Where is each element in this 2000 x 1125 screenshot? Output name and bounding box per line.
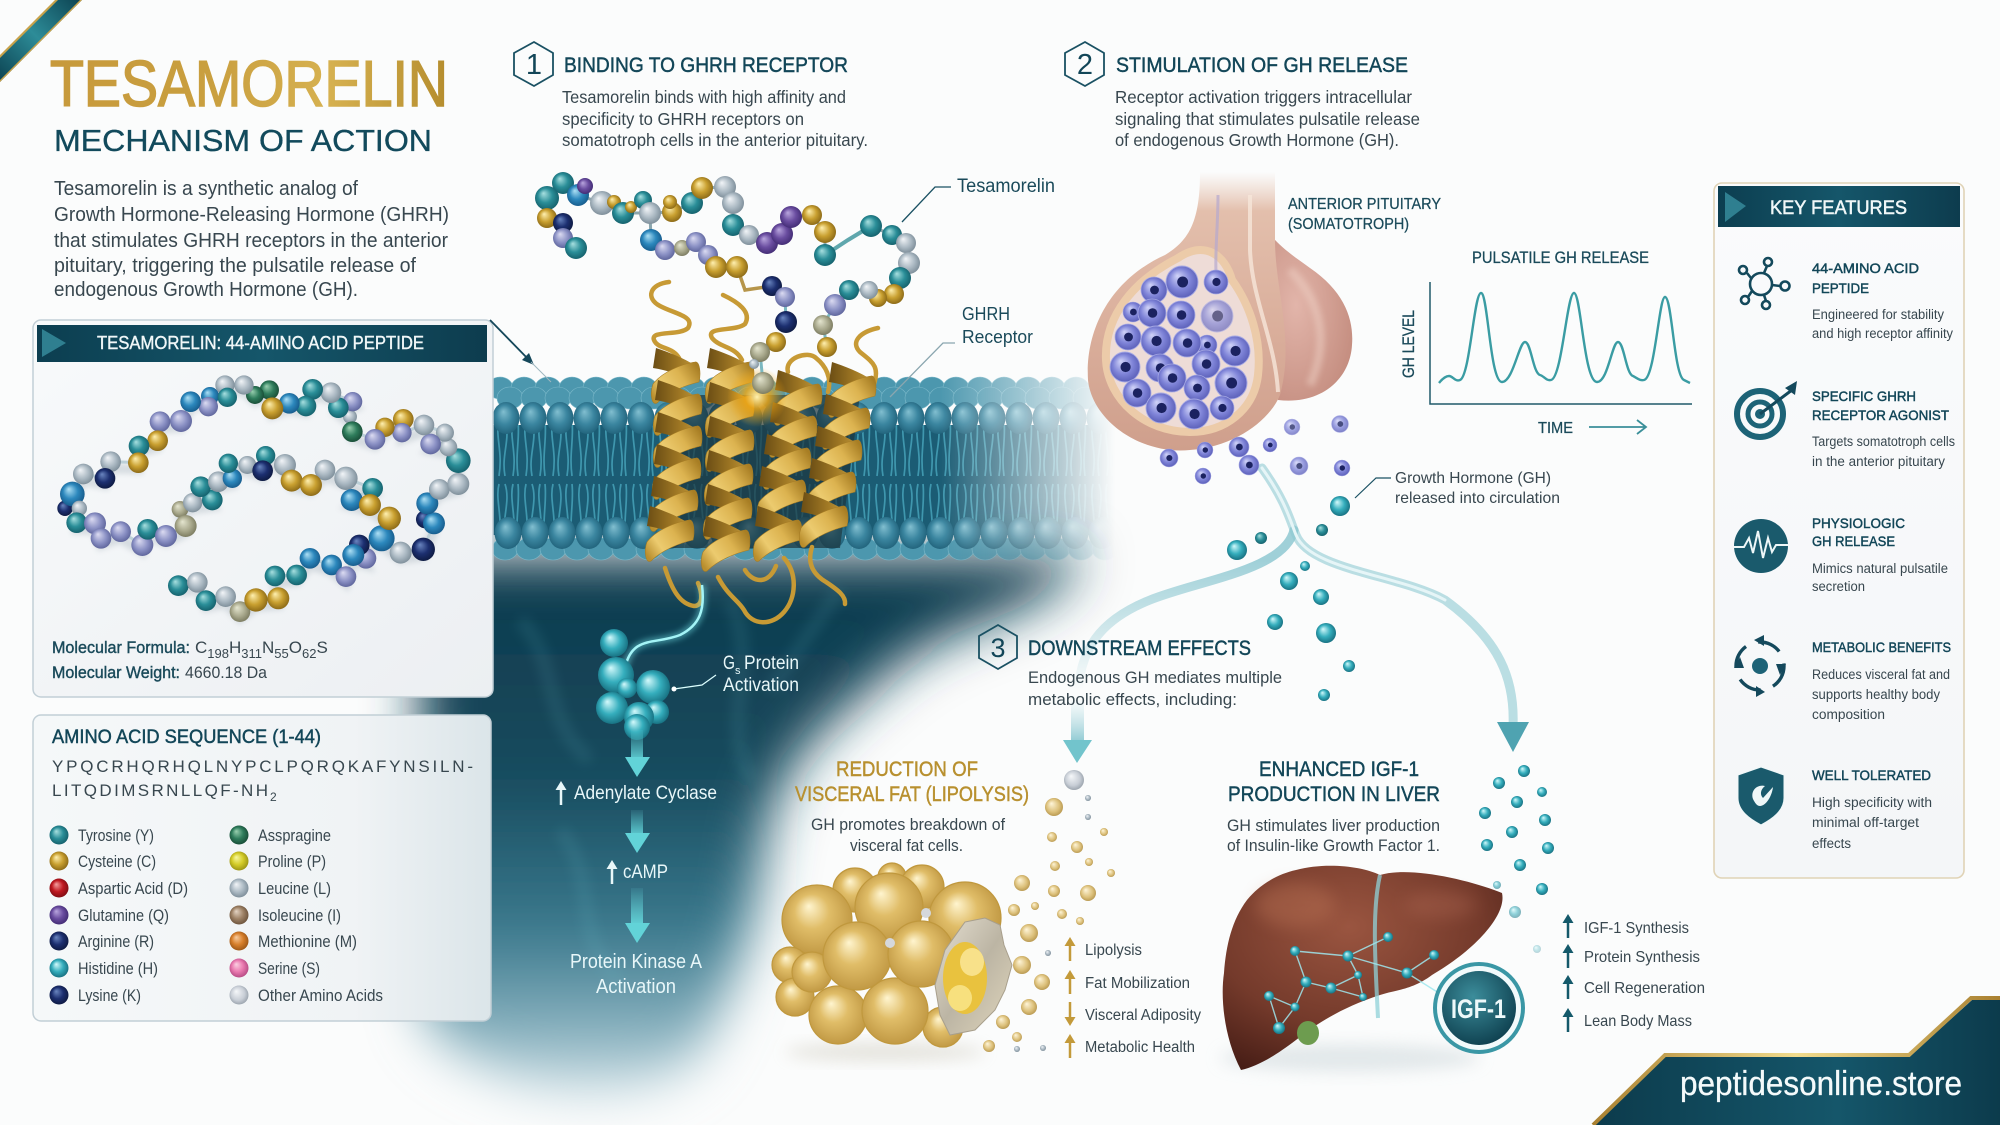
- list: liver effects: Protein Synthesis: [1584, 949, 1700, 966]
- liver network: [1264, 932, 1450, 1034]
- legend: amino acids: Arginine (R): [78, 932, 154, 951]
- helix wires: [651, 282, 878, 622]
- step 2 text: [1115, 87, 1420, 150]
- intro text: [54, 178, 449, 301]
- somatotroph cells: [1110, 266, 1250, 429]
- legend: amino acids: Histidine (H): [78, 959, 158, 978]
- feature: physiologic GH release: secretion: [1812, 579, 1865, 594]
- label: cAMP: [606, 860, 668, 884]
- IGF-1 particles: [1479, 765, 1554, 953]
- step 3 heading: 3: [990, 633, 1006, 663]
- step 2 heading: [1065, 42, 1408, 86]
- fat cell cluster: [772, 863, 1012, 1061]
- step 2 text: of endogenous Growth Hormone (GH).: [1115, 130, 1399, 150]
- visceral fat text: [811, 816, 1005, 855]
- list: liver effects: IGF-1 Synthesis: [1584, 920, 1689, 937]
- helix 4: [799, 362, 876, 547]
- pituitary gland: [1088, 172, 1352, 450]
- list: liver effects: [1562, 914, 1705, 1032]
- panel header: [37, 325, 487, 362]
- feature: specific GHRH receptor agonist: Targets somatotroph cells: [1812, 434, 1955, 449]
- feature: physiologic GH release: [1734, 515, 1948, 594]
- feature: metabolic benefits: Reduces visceral fat and: [1812, 667, 1950, 682]
- feature: specific GHRH receptor agonist: in the anterior pituitary: [1812, 454, 1945, 469]
- step 3 text: Endogenous GH mediates multiple: [1028, 668, 1282, 687]
- liver heading: [1228, 758, 1440, 806]
- label: protein kinase A activation: Protein Kinase A: [570, 951, 703, 973]
- sequence text: YPQCRHQRHQLNYPCLPQRQKAFYNSILN-: [52, 757, 473, 776]
- label: GHRH Receptor: Receptor: [962, 326, 1033, 347]
- label: cAMP: cAMP: [623, 862, 668, 883]
- label: Gs protein activation: [672, 653, 799, 696]
- liver text: of Insulin-like Growth Factor 1.: [1227, 837, 1440, 855]
- intro text: pituitary, triggering the pulsatile release of: [54, 255, 416, 277]
- label: Tesamorelin: Tesamorelin: [957, 176, 1055, 197]
- panel: key features: [1714, 183, 1964, 878]
- feature: metabolic benefits: METABOLIC BENEFITS: [1812, 639, 1951, 655]
- label: Gs protein activation: Protein: [744, 653, 799, 674]
- legend: amino acids: Proline (P): [258, 852, 326, 871]
- feature: physiologic GH release: GH RELEASE: [1812, 533, 1895, 549]
- step 1 heading: [514, 42, 848, 86]
- arrow: GH to liver: [1497, 722, 1529, 752]
- intracellular dark region: [420, 556, 1085, 1093]
- molecular data: 198: [207, 646, 229, 661]
- list: fat effects: Metabolic Health: [1085, 1039, 1195, 1056]
- list: fat effects: Fat Mobilization: [1085, 975, 1190, 992]
- legend: amino acids: Cysteine (C): [78, 852, 156, 871]
- feature: well tolerated: High specificity with: [1812, 795, 1932, 810]
- feature: well tolerated: WELL TOLERATED: [1812, 767, 1931, 783]
- step 3 text: [1028, 668, 1282, 709]
- step 1 text: somatotroph cells in the anterior pituitary.: [562, 130, 868, 150]
- legend: amino acids: Other Amino Acids: [258, 986, 383, 1005]
- arrow: to protein kinase A: [625, 888, 650, 943]
- molecular data: [52, 638, 328, 682]
- molecular data: 55: [274, 646, 289, 661]
- tesamorelin peptide on receptor: [535, 172, 920, 394]
- gallbladder: [1297, 1021, 1319, 1045]
- title: TESAMORELIN: [50, 47, 448, 120]
- molecular data: 4660.18 Da: [185, 663, 268, 682]
- feature: 44-amino acid peptide: Engineered for stability: [1812, 307, 1944, 322]
- feature: well tolerated: effects: [1812, 836, 1851, 851]
- list: liver effects: Cell Regeneration: [1584, 980, 1705, 997]
- pituitary label: ANTERIOR PITUITARY: [1288, 196, 1441, 213]
- chart: pulsatile GH release: GH LEVEL: [1400, 310, 1418, 378]
- step 2 heading: 2: [1077, 49, 1093, 81]
- subtitle: MECHANISM OF ACTION: [54, 123, 432, 158]
- molecular data: N: [262, 638, 274, 657]
- legend: amino acids: Tyrosine (Y): [78, 826, 154, 845]
- step 1 text: [562, 87, 868, 150]
- label: growth hormone released: released into circulation: [1395, 490, 1560, 507]
- peptide bead chain: [57, 375, 471, 622]
- chart: pulsatile GH release: PULSATILE GH RELEASE: [1472, 249, 1649, 267]
- feature: 44-amino acid peptide: and high receptor affinity: [1812, 326, 1953, 341]
- label: protein kinase A activation: [570, 951, 703, 998]
- feature: well tolerated: [1738, 767, 1932, 851]
- IGF-1 badge: [1435, 964, 1523, 1052]
- liver text: GH stimulates liver production: [1227, 817, 1440, 835]
- legend: amino acids: Serine (S): [258, 959, 320, 978]
- feature: specific GHRH receptor agonist: [1737, 381, 1955, 469]
- list: fat effects: Visceral Adiposity: [1085, 1007, 1201, 1024]
- feature: well tolerated: minimal off-target: [1812, 815, 1919, 830]
- label: Gs protein activation: s: [735, 665, 741, 677]
- liver text: [1227, 817, 1440, 855]
- step 2 text: signaling that stimulates pulsatile release: [1115, 109, 1420, 129]
- IGF-1 badge: IGF-1: [1451, 994, 1506, 1024]
- growth hormone particles: [1160, 416, 1355, 701]
- label: Gs protein activation: Activation: [723, 675, 799, 696]
- sequence text: 2: [270, 790, 277, 804]
- receptor core shadow: [670, 395, 860, 548]
- step 1 text: Tesamorelin binds with high affinity and: [562, 87, 846, 107]
- arrow: to cAMP: [625, 810, 650, 853]
- feature: specific GHRH receptor agonist: SPECIFIC GHRH: [1812, 388, 1916, 404]
- molecular data: Molecular Weight:: [52, 663, 180, 682]
- lipid droplets: [983, 770, 1115, 1052]
- feature: 44-amino acid peptide: [1739, 258, 1953, 341]
- legend: amino acids: Lysine (K): [78, 986, 141, 1005]
- molecular data: H: [229, 638, 241, 657]
- key features header: KEY FEATURES: [1770, 198, 1907, 219]
- liver heading: ENHANCED IGF-1: [1259, 758, 1419, 781]
- intro text: endogenous Growth Hormone (GH).: [54, 279, 358, 301]
- step 1 heading: 1: [526, 49, 542, 81]
- footer: website badge: peptidesonline.store: [1680, 1065, 1962, 1103]
- arrow: GH to fat: [1063, 700, 1092, 763]
- feature: specific GHRH receptor agonist: RECEPTOR AGONIST: [1812, 407, 1949, 423]
- sequence text: LITQDIMSRNLLQF-NH: [52, 781, 268, 800]
- chart: pulsatile GH release: [1400, 249, 1692, 437]
- step 3 heading: DOWNSTREAM EFFECTS: [1028, 637, 1251, 660]
- legend: amino acids: [50, 826, 383, 1005]
- panel header: TESAMORELIN: 44-AMINO ACID PEPTIDE: [97, 333, 424, 353]
- feature: 44-amino acid peptide: PEPTIDE: [1812, 280, 1869, 296]
- key features header: [1718, 186, 1960, 227]
- feature: 44-amino acid peptide: 44-AMINO ACID: [1812, 260, 1919, 276]
- label: Tesamorelin: [902, 176, 1055, 222]
- feature: metabolic benefits: composition: [1812, 707, 1885, 722]
- feature: metabolic benefits: supports healthy body: [1812, 687, 1940, 702]
- step 3 text: metabolic effects, including:: [1028, 690, 1237, 709]
- legend: amino acids: Isoleucine (I): [258, 906, 341, 925]
- list: fat effects: [1064, 937, 1201, 1058]
- panel: amino acid sequence: [33, 715, 491, 1021]
- circulation streams: [1078, 468, 1513, 726]
- ribbon: top left corner: [0, 0, 82, 82]
- legend: amino acids: Leucine (L): [258, 879, 331, 898]
- label: adenylate cyclase: Adenylate Cyclase: [574, 783, 717, 804]
- legend: amino acids: Aspartic Acid (D): [78, 879, 188, 898]
- visceral fat heading: [795, 758, 1029, 806]
- step 1 text: specificity to GHRH receptors on: [562, 109, 804, 129]
- arrow: peptide panel to membrane: [490, 320, 551, 382]
- sequence heading: AMINO ACID SEQUENCE (1-44): [52, 727, 321, 748]
- feature: physiologic GH release: PHYSIOLOGIC: [1812, 515, 1905, 531]
- feature: physiologic GH release: Mimics natural pulsatile: [1812, 561, 1948, 576]
- receptor helices: [645, 282, 878, 622]
- visceral fat heading: VISCERAL FAT (LIPOLYSIS): [795, 783, 1029, 806]
- intro text: Tesamorelin is a synthetic analog of: [54, 178, 358, 200]
- intro text: that stimulates GHRH receptors in the anterior: [54, 230, 448, 252]
- molecular data: Molecular Formula:: [52, 638, 190, 657]
- intro text: Growth Hormone-Releasing Hormone (GHRH): [54, 204, 449, 226]
- feature: metabolic benefits: [1734, 635, 1951, 722]
- panel: peptide structure: [33, 320, 493, 697]
- list: fat effects: Lipolysis: [1085, 942, 1142, 959]
- Gs protein cluster: [596, 585, 703, 740]
- label: Gs protein activation: G: [723, 653, 735, 674]
- step 3 heading: [979, 625, 1251, 669]
- helix 2: [701, 348, 754, 571]
- molecular data: C: [195, 638, 207, 657]
- visceral fat text: GH promotes breakdown of: [811, 816, 1005, 834]
- label: growth hormone released: Growth Hormone (GH): [1395, 470, 1551, 487]
- sequence text: [52, 757, 473, 804]
- binding glow: [727, 367, 787, 427]
- helix 1: [645, 348, 702, 561]
- list: liver effects: Lean Body Mass: [1584, 1013, 1692, 1030]
- liver heading: PRODUCTION IN LIVER: [1228, 783, 1440, 806]
- ruptured fat cell: [935, 918, 1012, 1035]
- liver: [1220, 866, 1503, 1072]
- footer: website badge: [1593, 998, 2000, 1125]
- visceral fat text: visceral fat cells.: [850, 837, 963, 855]
- molecular data: 311: [241, 646, 262, 661]
- label: GHRH Receptor: [890, 303, 1033, 397]
- molecular data: 62: [302, 646, 316, 661]
- label: GHRH Receptor: GHRH: [962, 303, 1010, 324]
- chart: pulsatile GH release: TIME: [1538, 420, 1573, 437]
- visceral fat heading: REDUCTION OF: [836, 758, 978, 781]
- helix 3: [753, 370, 822, 561]
- step 2 text: Receptor activation triggers intracellular: [1115, 87, 1412, 107]
- arrow: Gs to adenylate cyclase: [625, 730, 650, 777]
- legend: amino acids: Glutamine (Q): [78, 906, 169, 925]
- step 2 heading: STIMULATION OF GH RELEASE: [1116, 54, 1408, 77]
- pituitary label: [1288, 196, 1441, 233]
- step 1 heading: BINDING TO GHRH RECEPTOR: [564, 54, 848, 77]
- label: growth hormone released: [1355, 470, 1560, 507]
- legend: amino acids: Asspragine: [258, 826, 331, 845]
- legend: amino acids: Methionine (M): [258, 932, 357, 951]
- label: protein kinase A activation: Activation: [596, 976, 676, 998]
- molecular data: O: [289, 638, 302, 657]
- cell membrane: [487, 377, 1133, 560]
- pituitary label: (SOMATOTROPH): [1288, 216, 1409, 233]
- molecular data: S: [316, 638, 328, 657]
